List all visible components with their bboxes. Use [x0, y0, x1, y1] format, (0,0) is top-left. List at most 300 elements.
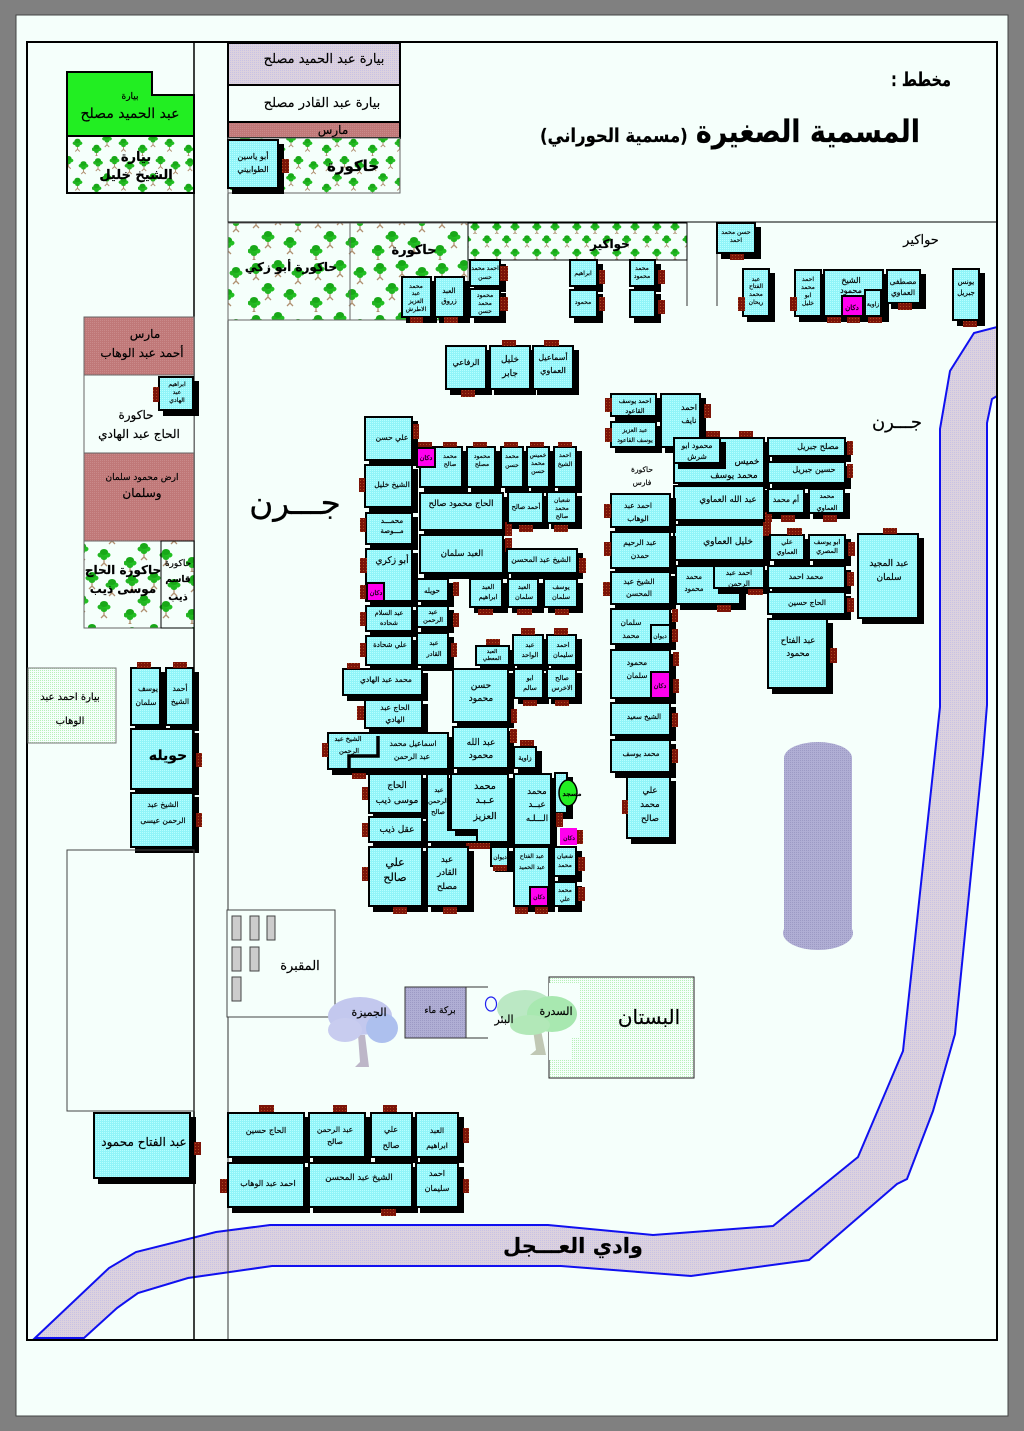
house: Salih al-Akhras: الاخرس — [551, 684, 573, 692]
house: Abd al-Rahim Hamdan: حمدن — [631, 551, 650, 560]
house: Ali Salih south: علي — [384, 1125, 398, 1134]
plot: hakura Abu Zikri: حاكورة أبو زكي — [245, 259, 337, 275]
house: Abdullah Mahmud: عبد الله — [467, 738, 495, 748]
house: al-Abd Salman: العبد سلمان — [441, 549, 483, 559]
house: Abd al-Majid Salman: عبد المجيد — [869, 559, 909, 569]
house: Mahmud Muslih: مصلح — [475, 461, 489, 468]
house: Ahmad Abd al-Rahman: الرحمن — [728, 580, 750, 588]
plot: threshing ground: مارس — [318, 123, 348, 138]
house: Ahmad Yusuf al-Qaud — [605, 394, 656, 416]
house: Khamis Muhammad Hasan: حسن — [531, 468, 545, 475]
house: Ali Muhammad Salih: علي — [643, 786, 657, 796]
house: Ahmad Sulayman — [547, 628, 576, 665]
house: Muhammad Abd al-Aziz: العزيز — [472, 811, 497, 822]
house: Umm Muhammad: أم محمد — [773, 494, 799, 504]
house: Sheikh Mahmud: الشيخ — [841, 276, 861, 285]
house: Ismail Muhammad Abd al-Rahman: الرحمن — [339, 747, 359, 755]
house: Muhammad Abd al-Aziz: عـبـد — [475, 795, 495, 806]
plot: lilac orchard — [228, 43, 400, 85]
house: Ali Salih: علي — [385, 856, 405, 869]
tree: sycamore — [328, 997, 398, 1067]
house: Abdullah Mahmud: محمود — [469, 751, 493, 761]
house: al-Abd Ibrahim south: ابراهيم — [426, 1141, 448, 1150]
plot: hakura al-Hajj Abd al-Hadi: حاكورة — [118, 408, 154, 423]
plot: hakura Qasim Dhib — [161, 541, 194, 628]
house: Abd al-Majid Salman — [858, 528, 918, 618]
house: Ahmad Sulayman south: احمد — [429, 1169, 445, 1178]
plot: orchard Ahmad Abd al-Wahhab — [28, 668, 116, 743]
shop: dukkan east: دكان — [654, 682, 666, 690]
water tank cylinder — [783, 742, 853, 950]
house: Salih al-Akhras — [547, 669, 576, 706]
house: Ahmad Muhammad Hasan: احمد محمد — [471, 265, 499, 272]
plot: hakura Qasim Dhib: ذيب — [168, 592, 188, 603]
house: al-Hajj Musa Dhib: موسى ذيب — [376, 796, 419, 806]
house: Abd al-Fattah Mahmud — [768, 619, 837, 688]
house: Abu Yusuf al-Masri — [809, 535, 855, 560]
water pool — [405, 987, 488, 1038]
house: diwan: ديوان — [493, 854, 507, 861]
house: Huwayla west: حويله — [149, 748, 187, 764]
house: Muhammad Abdullah: الـــلـه — [526, 814, 548, 824]
house: Shaaban Muhammad: شعبان — [557, 853, 573, 860]
house: Abdullah Mahmud — [453, 727, 517, 768]
house: Shaaban Muhammad Salih: شعبان — [554, 497, 570, 504]
house: Sheikh Abd al-Muhsin south — [309, 1163, 412, 1216]
house: Sheikh Mahmud: محمود — [840, 286, 862, 295]
house: Yunis Jibril: جبريل — [957, 289, 975, 297]
house: Sheikh Abd al-Muhsin east — [603, 572, 670, 604]
house: Abd al-Rahman Salih: صالح — [431, 808, 445, 816]
house: Aql Dhib — [362, 817, 422, 842]
house: Shaaban Muhammad Salih — [547, 492, 576, 532]
house: Abd al-Rahman Salih: عبد — [434, 786, 444, 794]
house: Ahmad Abd al-Wahhab south — [220, 1163, 304, 1207]
plot: hakura al-Hajj Musa Dhib: موسى ذيب — [90, 582, 156, 597]
house: Mahmud Muhammad Hasan: حسن — [478, 308, 492, 315]
house: al-Rifai: الرفاعي — [453, 358, 479, 367]
house: Abd al-Salam Shahada: عبد السلام — [375, 609, 404, 617]
house: Ali Shahada: علي شحادة — [373, 641, 407, 649]
house: Ali Salih — [362, 847, 422, 914]
house: Ali Hasan: علي حسن — [376, 433, 408, 442]
house: Ibrahim Abd al-Hadi — [153, 377, 193, 410]
house: Ahmad Muhammad Abu Khalil: احمد — [802, 276, 814, 283]
house: Yusuf Salman west: سلمان — [136, 698, 156, 707]
house: Mahmud Muslih — [467, 442, 495, 487]
house: Husayn Jibril: حسين جبريل — [792, 465, 836, 474]
house: Muhammad Abd al-Hadi — [343, 663, 422, 695]
house: Muslih Jibril: مصلح جبريل — [797, 442, 839, 451]
house: Ali Muhammad Salih — [622, 777, 670, 838]
plot: hakura al-Hajj Abd al-Hadi: الحاج عبد الهادي — [98, 427, 180, 441]
shop: dukkan mosque: دكان — [563, 835, 575, 842]
house: Abd al-Rahman: عبد — [428, 608, 438, 616]
shop: dukkan Muhammad Salih: دكان — [420, 454, 432, 462]
plot: white orchard: بيارة عبد القادر مصلح — [264, 96, 380, 111]
house: diwan east: ديوان — [653, 633, 667, 640]
plot: orchard Sheikh Khalil — [67, 136, 194, 193]
house: Abd al-Qadir: عبد — [429, 639, 439, 647]
house: Ali Muhammad Salih: صالح — [641, 814, 659, 824]
house: al-Hajj Abd al-Hadi: الحاج عبد — [380, 703, 410, 712]
house: Yusuf Salman west: يوسف — [138, 684, 158, 693]
shop: dukkan south — [530, 887, 548, 906]
house: al-Hajj Mahmud Salih: الحاج محمود صالح — [429, 499, 493, 509]
shop: dukkan Muhammad Salih — [417, 448, 435, 467]
plot: hakura al-Hajj Musa Dhib: حاكورة الحاج — [85, 563, 161, 578]
house: Abu Yasin — [228, 140, 289, 188]
house: Ahmad al-Sheikh: الشيخ — [558, 461, 573, 468]
house: Hasan Muhammad Ahmad: حسن محمد — [721, 229, 751, 236]
house: Abu Salim: سالم — [523, 684, 537, 692]
house: Khamis Muhammad Hasan — [527, 442, 549, 487]
house: Abu Yusuf al-Masri: ابو يوسف — [814, 538, 840, 546]
house: Ahmad Muhammad Abu Khalil — [790, 270, 821, 316]
house: al-Abd al-Muti — [476, 639, 509, 665]
house: Ibrahim Abd al-Hadi: ابراهيم — [168, 381, 186, 388]
house: Abd al-Fattah Abd al-Hamid — [514, 847, 549, 914]
house: zawiya central: زاوية — [518, 754, 532, 762]
house: Abd al-Qadir Muslih: القادر — [436, 868, 457, 878]
house: Ahmad al-Sheikh west: أحمد — [172, 683, 188, 693]
house: Yusuf Salman west — [131, 662, 160, 725]
tree: sidra: السدرة — [539, 1005, 573, 1018]
south houses — [220, 1105, 469, 1216]
house: Ahmad Abd al-Wahhab: احمد عبد — [624, 501, 652, 510]
plot: hakura middle — [350, 223, 468, 320]
house: Muhammad Mahmud east — [676, 566, 740, 612]
house: Mahmud: محمود — [575, 299, 591, 306]
house: Abu Yasin: أبو ياسين — [238, 151, 268, 161]
house: Muhammad Ahmad: محمد احمد — [789, 572, 823, 581]
house: Ahmad Yusuf al-Qaud: القاعود — [625, 407, 645, 415]
house: al-Hajj Abd al-Hadi: الهادي — [385, 715, 405, 724]
house: al-Abd Ibrahim — [470, 579, 502, 615]
house: Yusuf Salman: يوسف — [552, 583, 570, 591]
house: al-Hajj Musa Dhib — [362, 774, 422, 813]
house: Ismail Muhammad Abd al-Rahman: اسماعيل محمد — [390, 739, 436, 748]
house: Ismail al-Amawi: أسماعيل — [538, 352, 568, 362]
house: Ismail Muhammad Abd al-Rahman: عبد الرحمن — [394, 752, 430, 761]
house: Mustafa al-Amawi: مصطفى — [890, 277, 916, 286]
house: Abd al-Salam Shahada: شحاده — [380, 619, 398, 627]
house: Hasan Mahmud — [453, 669, 517, 723]
house: Abdullah al-Amawi: عبد الله العماوي — [699, 495, 757, 505]
house: Muhammad al-Amawi: محمد — [820, 492, 834, 500]
house: Abd al-Wahid: عبد — [525, 641, 535, 649]
house: Muhammad al-Amawi: العماوي — [817, 504, 838, 512]
shop: dukkan mosque — [560, 828, 583, 845]
house: Ibrahim — [570, 260, 605, 286]
house: Shaaban Muhammad — [554, 847, 585, 876]
river: wadi al-ajal: وادي العـــجل — [503, 1234, 643, 1259]
house: Muhammad Yusuf: محمد يوسف — [623, 750, 660, 758]
house: Sheikh Abd al-Rahman Issa — [131, 793, 202, 847]
house: Ismail Muhammad Abd al-Rahman — [322, 733, 448, 779]
house: Muhammad Mahmud: محمود — [634, 273, 650, 280]
house: Ahmad Abd al-Wahhab: الوهاب — [627, 514, 649, 523]
house: Khalil Jabir: جابر — [501, 369, 518, 379]
well: البئر — [493, 1013, 514, 1026]
house: Salman Muhammad: محمد — [622, 631, 640, 640]
house: Hasan Mahmud: محمود — [469, 694, 493, 704]
shop: dukkan: دكان — [845, 304, 859, 312]
house: Muhammad Abd al-Aziz: محمد — [474, 781, 496, 792]
house: Abd al-Rahman Salih south — [309, 1105, 365, 1157]
house: al-Abd Ibrahim: العبد — [482, 583, 494, 591]
house: Muhammad Abdullah: محمد — [527, 787, 547, 797]
plot: hakura top: حاكورة — [327, 157, 379, 175]
house: Khamis Muhammad Hasan: محمد — [531, 460, 545, 467]
house: Ahmad al-Sheikh west: الشيخ — [171, 697, 189, 706]
house: Muhammad Abdullah: عبــد — [528, 800, 546, 810]
house: Abd al-Rahman Salih south: عبد الرحمن — [317, 1125, 353, 1134]
label: hakura Faris — [631, 465, 653, 487]
house: Mahmud Muhammad Hasan — [470, 289, 508, 317]
house: Umm Muhammad — [768, 489, 804, 522]
house: al-Abd Salman small — [508, 579, 538, 615]
house: Abd al-Rahman: الرحمن — [423, 616, 443, 624]
house: Muhammad Abd al-Hadi: محمد عبد الهادي — [360, 675, 412, 684]
house: al-Hajj Husayn south — [228, 1105, 304, 1157]
house: Yusuf Salman: سلمان — [552, 593, 570, 601]
house: Muhammad Salih: صالح — [444, 461, 456, 468]
house: diwan east — [651, 625, 670, 644]
house: Ahmad Muhammad Abu Khalil: محمد — [801, 284, 815, 291]
house: Abd al-Wahid: الواحد — [522, 651, 538, 659]
plot: cemetery: المقبرة — [280, 959, 320, 974]
house: Ibrahim Abd al-Hadi: عبد — [173, 389, 181, 396]
house: al-Sheikh Khalil: الشيخ خليل — [374, 480, 410, 489]
house: Ali Shahada — [360, 636, 412, 665]
house: Muhammad Salih — [418, 442, 462, 487]
label: hakura Faris: فارس — [633, 478, 652, 487]
plot: threshing Ahmad Abd al-Wahhab: أحمد عبد الوهاب — [100, 345, 184, 361]
house: Abu Zikri: أبو زكري — [375, 554, 409, 566]
house: Ahmad Abd al-Wahhab south: احمد عبد الوهاب — [240, 1179, 296, 1188]
house: Mahmud Muhammad Hasan: محمود — [477, 292, 493, 299]
house: Ahmad al-Sheikh: احمد — [559, 452, 571, 459]
house: Mahmud Muslih: محمود — [474, 453, 490, 460]
house: al-Abd al-Muti: المعطي — [483, 656, 502, 662]
west strip — [28, 317, 202, 1178]
house: Abd al-Rahman Salih: الرحمن — [428, 797, 448, 805]
house: Sheikh Said: الشيخ سعيد — [627, 713, 661, 721]
plot: green orchard Abd al-Hamid Muslih: بيارة — [121, 92, 139, 102]
label: hakura Faris: حاكورة — [631, 465, 653, 474]
house: Ahmad Abd al-Rahman — [714, 566, 764, 595]
house: mosque annex — [555, 773, 567, 827]
title — [540, 69, 951, 150]
house: Abd al-Rahman — [417, 606, 459, 627]
water pool: بركة ماء — [424, 1006, 456, 1016]
house: al-Abd Ibrahim south: العبد — [430, 1126, 444, 1135]
house: Salih al-Akhras: صالح — [555, 674, 569, 682]
house: Huwayla west — [131, 729, 202, 789]
house: zawiya: زاوية — [867, 301, 879, 308]
plot: threshing ground — [228, 122, 400, 138]
house row north — [402, 223, 979, 397]
house: Ahmad Sulayman south: سليمان — [425, 1184, 450, 1193]
plot: cemetery — [227, 910, 335, 1017]
house: Abd al-Wahid — [513, 628, 543, 665]
plot: hakura Abu Zikri — [228, 223, 350, 320]
tree: sidra — [497, 990, 577, 1055]
house: Muhammad Mahmud — [630, 260, 665, 286]
house: Abu Zikri — [360, 549, 412, 601]
house: Ahmad Salih: أحمد صالح — [512, 502, 541, 511]
house: Muhammad Ali — [554, 882, 585, 906]
house: al-Rifai — [446, 346, 486, 397]
plot: white orchard — [228, 85, 400, 122]
house: Ahmad Nayif: نايف — [681, 416, 697, 425]
house: Muhammad Mahmud east: محمد — [686, 573, 702, 581]
house: Muhammad Musa: محمـــد — [381, 517, 403, 525]
plot: land Mahmud Salman — [84, 453, 194, 541]
title: مخطط : — [891, 69, 951, 91]
house: Abd al-Rahim Hamdan: عبد الرحيم — [623, 538, 657, 547]
house: Mahmud — [570, 290, 605, 317]
house: zawiya — [865, 290, 882, 323]
house: Muhammad Ali: محمد — [558, 887, 572, 894]
house: Khalil al-Amawi: خليل العماوي — [703, 537, 753, 547]
house: Ibrahim: ابراهيم — [574, 270, 592, 277]
house: Muhammad Abd al-Aziz al-Atrash — [402, 277, 431, 323]
house: Ali al-Amawi: علي — [781, 538, 793, 546]
house: Ahmad Abd al-Rahman: احمد عبد — [726, 569, 752, 577]
house: Abd al-Aziz Yusuf al-Qaud: يوسف القاعود — [617, 437, 653, 444]
house: al-Abd Zurayq — [435, 277, 464, 323]
house: Ahmad Sulayman: سليمان — [553, 651, 573, 659]
plot: hakura Qasim Dhib: قاسم — [165, 575, 191, 585]
house: Husayn Jibril — [768, 462, 853, 483]
house: Muhammad Abdullah — [514, 774, 551, 845]
house: Mahmud Salman: محمود — [627, 658, 647, 667]
plot: hakura al-Hajj Musa Dhib — [84, 541, 161, 628]
house: Ahmad Muhammad Abu Khalil: خليل — [802, 300, 814, 307]
house: Huwayla — [417, 579, 459, 601]
plot: orchard Ahmad Abd al-Wahhab: الوهاب — [56, 716, 84, 727]
house: Sheikh Abd al-Rahman Issa: الشيخ عبد — [147, 800, 179, 809]
house: Muhammad Abd al-Aziz al-Atrash: محمد — [409, 283, 423, 290]
house: Abd al-Fattah Muhammad Rihan: الفتاح — [749, 283, 763, 290]
house: Mahmud Abu Shurush — [674, 438, 720, 463]
house: Khalil Jabir — [490, 340, 530, 389]
house: Sheikh Abd al-Muhsin — [507, 549, 586, 573]
plot: threshing Ahmad Abd al-Wahhab: مارس — [130, 327, 160, 342]
house: Abu Salim — [514, 669, 543, 706]
house: Yunis Jibril — [953, 269, 979, 327]
house: unnamed — [630, 290, 665, 317]
house: al-Hajj Abd al-Hadi — [357, 700, 422, 728]
house: Abd al-Fattah Mahmud south — [94, 1113, 201, 1178]
shop: dukkan south: دكان — [533, 894, 545, 901]
plot: hawakir small trees — [468, 223, 687, 260]
house: Ahmad al-Sheikh — [554, 442, 576, 487]
house: Abd al-Fattah Muhammad Rihan: عبد — [752, 276, 760, 283]
plot: orchard Ahmad Abd al-Wahhab: بيارة احمد عبد — [40, 692, 100, 703]
house: Abd al-Aziz Yusuf al-Qaud: عبد العزيز — [621, 427, 648, 434]
house: Mahmud Salman — [611, 650, 679, 698]
plot: hawakir small trees: حواكير — [589, 237, 630, 252]
house: Muhammad Musa: مـــوصة — [380, 527, 404, 535]
house: Muhammad al-Amawi — [809, 489, 844, 522]
house: Khamis Muhammad Yusuf — [674, 431, 764, 483]
house: Ali al-Amawi: العماوي — [777, 548, 798, 556]
house: Abdullah al-Amawi — [674, 486, 772, 522]
house: Khalil Jabir: خليل — [501, 355, 519, 365]
house: al-Abd Salman small: سلمان — [515, 593, 533, 601]
house: Shaaban Muhammad Salih: صالح — [556, 513, 568, 520]
house: Ismail al-Amawi — [533, 340, 573, 389]
house: Muhammad Musa — [360, 513, 412, 544]
house: Muhammad Abd al-Aziz al-Atrash: الاطرش — [406, 306, 427, 313]
house: Muhammad Salih: محمد — [443, 453, 457, 460]
house: Ahmad Muhammad Hasan: حسن — [478, 274, 492, 281]
house: Ibrahim Abd al-Hadi: الهادي — [169, 397, 185, 404]
house: Abd al-Rahim Hamdan — [604, 532, 670, 568]
tree: sycamore: الجميزة — [351, 1006, 387, 1019]
house: Salman Muhammad — [611, 609, 678, 644]
house: Salman Muhammad: سلمان — [621, 618, 641, 627]
house: Abd al-Qadir Muslih: مصلح — [437, 882, 457, 892]
plot: green orchard Abd al-Hamid Muslih: عبد الحميد مصلح — [80, 106, 180, 122]
house: Muslih Jibril — [768, 438, 853, 456]
house: Shaaban Muhammad Salih: محمد — [555, 505, 569, 512]
house: Abd al-Qadir — [417, 633, 457, 665]
house: Abd al-Qadir: القادر — [425, 650, 442, 658]
house: Abd al-Rahman Salih — [427, 774, 477, 842]
shop: dukkan — [842, 296, 863, 323]
house: Khamis Muhammad Yusuf: خميس — [735, 457, 759, 467]
plot: hakura Qasim Dhib: حاكورة — [165, 559, 191, 569]
house: Khalil al-Amawi — [674, 522, 771, 560]
house: zawiya central — [514, 740, 536, 768]
house: Ahmad Sulayman south — [416, 1163, 469, 1207]
house: Khamis Muhammad Hasan: خميس — [530, 452, 547, 459]
house: Abd al-Fattah Mahmud: عبد الفتاح — [781, 636, 815, 646]
plot: threshing Ahmad Abd al-Wahhab — [84, 317, 194, 375]
plot: orchard Sheikh Khalil: بيارة — [121, 150, 151, 165]
plot: bustan garden — [549, 977, 694, 1078]
house: al-Abd Ibrahim south — [416, 1113, 469, 1157]
icon: mosque: مسجد — [562, 790, 582, 798]
house: Ali Salih: صالح — [383, 871, 407, 884]
house: Mahmud Abu Shurush: شرش — [687, 452, 707, 461]
house: Abu Salim: ابو — [526, 674, 534, 682]
house: Abd al-Fattah Mahmud south: عبد الفتاح محمود — [101, 1135, 187, 1150]
house: Ahmad Muhammad Hasan — [470, 260, 508, 286]
house: Hasan Muhammad Ahmad — [717, 223, 755, 260]
house: Sheikh Abd al-Muhsin south: الشيخ عبد المحسن — [325, 1173, 393, 1183]
title: المسمية الصغيرة (مسمية الحوراني) — [540, 114, 920, 150]
house: Ali Hasan — [365, 417, 419, 460]
house: Sheikh Said — [611, 703, 678, 735]
house: Abd al-Fattah Muhammad Rihan: محمد — [749, 291, 763, 298]
house: Muhammad Mahmud east: محمود — [684, 585, 704, 593]
shop: dukkan Abu Zikri: دكان — [370, 589, 382, 597]
plot: green orchard Abd al-Hamid Muslih — [67, 72, 194, 136]
house: Sheikh Abd al-Muhsin east: الشيخ عبد — [623, 577, 655, 586]
house: Hasan Mahmud: حسن — [471, 681, 491, 691]
house: Abu Yasin: الطوابيني — [237, 165, 269, 174]
house: Mustafa al-Amawi — [887, 270, 920, 310]
house: Muhammad Mahmud: محمد — [635, 265, 649, 272]
house: Abd al-Qadir Muslih: عبد — [441, 855, 453, 865]
shop: dukkan east — [651, 672, 670, 698]
house: Ali Salih south — [371, 1105, 412, 1157]
